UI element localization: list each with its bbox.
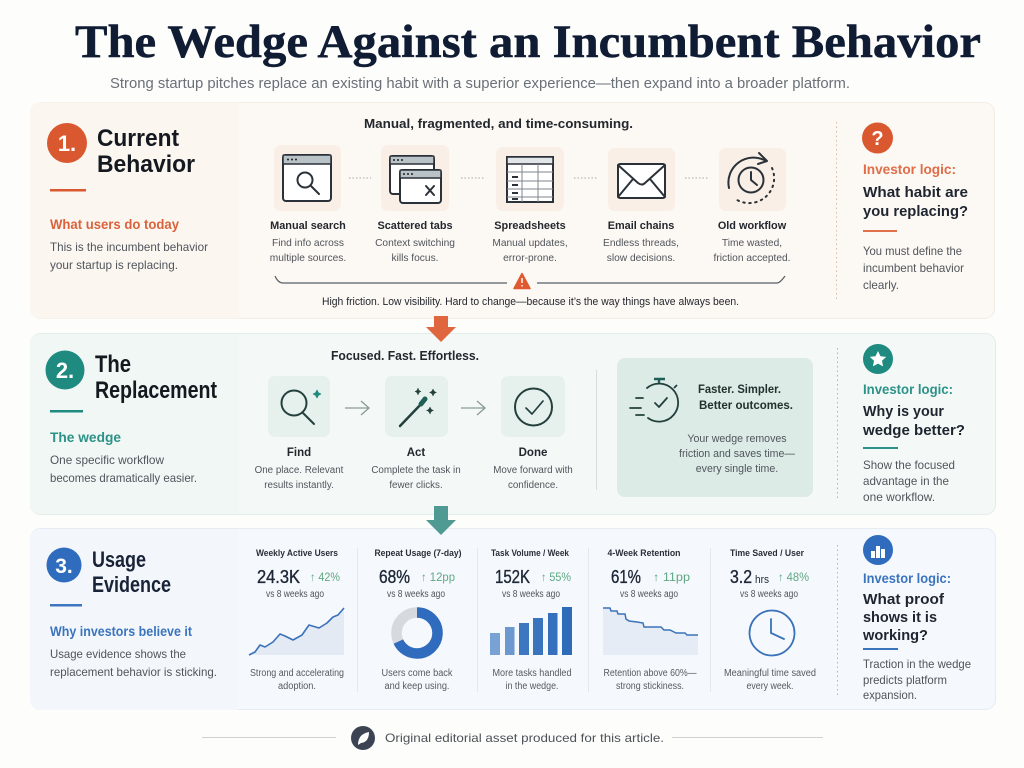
left column: usage evidence bbox=[30, 529, 238, 710]
metric: time saved: Time Saved / User bbox=[730, 548, 804, 558]
heading: Usage bbox=[92, 547, 146, 572]
metric: weekly active users: vs 8 weeks ago bbox=[266, 589, 324, 600]
workflow labels: multiple sources. bbox=[270, 253, 346, 264]
subtitle: Strong startup pitches replace an existing habit with a superior experience—then expand into a broader platform. bbox=[110, 75, 850, 92]
footer: Original editorial asset produced for this article. bbox=[385, 731, 664, 745]
tile: done bbox=[501, 376, 565, 437]
subheading: Why investors believe it bbox=[50, 624, 192, 639]
workflow labels: slow decisions. bbox=[607, 253, 675, 264]
metric: task volume: in the wedge. bbox=[506, 681, 558, 692]
callout: faster simpler: Better outcomes. bbox=[699, 400, 793, 412]
workflow labels: Context switching bbox=[375, 238, 455, 249]
workflow labels: Endless threads, bbox=[603, 238, 679, 249]
heading: The bbox=[95, 351, 131, 378]
replacement labels: Act bbox=[407, 447, 425, 459]
metric: task volume: More tasks handled bbox=[492, 668, 572, 679]
subheading: What users do today bbox=[50, 217, 179, 232]
metric: repeat usage: ↑ 12pp bbox=[421, 572, 455, 584]
left column: current behavior: Behavior bbox=[97, 151, 195, 178]
metric: repeat usage: Users come back bbox=[382, 668, 453, 679]
workflow labels: Time wasted, bbox=[722, 238, 782, 249]
badge 2 bbox=[46, 350, 84, 390]
workflow labels: Scattered tabs bbox=[377, 220, 453, 232]
investor logic 2: Show the focused bbox=[863, 459, 955, 472]
replacement labels: Complete the task in bbox=[371, 465, 461, 476]
metric: time saved: vs 8 weeks ago bbox=[740, 589, 798, 600]
investor logic 1: clearly. bbox=[863, 279, 899, 292]
donut chart bbox=[396, 612, 438, 654]
workflow labels: Spreadsheets bbox=[494, 220, 566, 232]
investor logic 3: What proof bbox=[863, 592, 944, 608]
left column: current behavior: your startup is replacing. bbox=[50, 259, 178, 272]
workflow labels: Email chains bbox=[608, 220, 674, 232]
workflow labels bbox=[270, 220, 791, 264]
line chart bbox=[249, 608, 344, 655]
badge 2: 2. bbox=[56, 358, 74, 383]
panel: usage evidence bbox=[30, 528, 996, 710]
metric: weekly active users: adoption. bbox=[278, 681, 316, 692]
workflow labels: Manual updates, bbox=[492, 238, 568, 249]
callout: faster simpler: every single time. bbox=[696, 463, 778, 475]
metric dividers bbox=[358, 548, 710, 692]
metric: retention: 61% bbox=[611, 567, 641, 587]
investor logic 3: shows it is bbox=[863, 610, 937, 626]
left column: replacement: becomes dramatically easier. bbox=[50, 472, 197, 485]
subheading: The wedge bbox=[50, 430, 121, 445]
metric: repeat usage bbox=[374, 548, 462, 692]
badge 1 bbox=[47, 123, 87, 163]
friction bracket with warning icon bbox=[275, 274, 785, 288]
replacement labels: results instantly. bbox=[264, 480, 334, 491]
investor logic 2: one workflow. bbox=[863, 491, 935, 504]
workflow heading: Manual, fragmented, and time-consuming. bbox=[364, 116, 633, 131]
workflow labels: kills focus. bbox=[392, 253, 438, 264]
connector dots bbox=[349, 177, 708, 179]
investor logic 1: incumbent behavior bbox=[863, 262, 964, 275]
metric: task volume: vs 8 weeks ago bbox=[502, 589, 560, 600]
left column: replacement: Replacement bbox=[95, 377, 217, 404]
replacement heading: Focused. Fast. Effortless. bbox=[331, 348, 479, 363]
investor logic 2 bbox=[862, 344, 965, 504]
arrow bbox=[461, 401, 485, 415]
metric: retention: Retention above 60%— bbox=[604, 668, 697, 679]
divider bbox=[836, 122, 838, 302]
investor logic 1: you replacing? bbox=[863, 204, 968, 220]
heading: Current bbox=[97, 125, 179, 152]
metric: retention: vs 8 weeks ago bbox=[620, 589, 678, 600]
metric: weekly active users bbox=[249, 548, 344, 692]
icon: clock bbox=[750, 610, 794, 656]
callout: faster simpler: Faster. Simpler. bbox=[698, 384, 781, 396]
replacement labels: Done bbox=[519, 447, 547, 459]
tile: spreadsheets bbox=[496, 147, 564, 211]
badge 3 bbox=[46, 548, 82, 582]
metric: repeat usage: Repeat Usage (7-day) bbox=[374, 548, 462, 558]
metric: retention bbox=[603, 548, 698, 692]
replacement labels bbox=[255, 447, 573, 491]
metric: time saved bbox=[724, 548, 816, 692]
replacement labels: One place. Relevant bbox=[255, 465, 344, 476]
metric: time saved: 3.2 bbox=[730, 567, 752, 587]
left column: replacement bbox=[30, 334, 239, 514]
metric: task volume: ↑ 55% bbox=[541, 572, 571, 584]
investor logic 1: You must define the bbox=[863, 245, 962, 258]
tile: email chains bbox=[608, 148, 675, 211]
investor logic 2: advantage in the bbox=[863, 475, 949, 488]
investor logic 3: Investor logic: bbox=[863, 571, 951, 586]
bar chart bbox=[490, 607, 572, 655]
tile: old workflow bbox=[719, 148, 786, 211]
investor logic 2: wedge better? bbox=[862, 423, 965, 439]
workflow labels: friction accepted. bbox=[713, 253, 791, 264]
workflow labels: Find info across bbox=[272, 238, 344, 249]
title: The Wedge Against an Incumbent Behavior bbox=[75, 16, 981, 68]
metric: task volume: 152K bbox=[495, 567, 530, 587]
investor logic 2: Investor logic: bbox=[863, 382, 953, 397]
investor logic 1: What habit are bbox=[863, 185, 968, 201]
metric: retention: ↑ 11pp bbox=[653, 572, 690, 584]
replacement labels: confidence. bbox=[508, 480, 558, 491]
workflow labels: error-prone. bbox=[503, 253, 557, 264]
badge 3: 3. bbox=[55, 555, 73, 578]
arrow: teal down bbox=[426, 506, 456, 535]
metric: retention: 4-Week Retention bbox=[608, 548, 680, 558]
investor logic 3: predicts platform bbox=[863, 674, 947, 687]
panel: the replacement bbox=[30, 334, 996, 514]
footer bbox=[202, 726, 823, 750]
metric: time saved: Meaningful time saved bbox=[724, 668, 816, 679]
tile: find bbox=[268, 376, 330, 437]
investor logic 3: Traction in the wedge bbox=[863, 658, 971, 671]
tile: scattered tabs bbox=[381, 145, 449, 211]
investor logic 1: ? bbox=[871, 128, 884, 150]
metric: retention: strong stickiness. bbox=[616, 681, 684, 692]
investor logic 1: Investor logic: bbox=[863, 162, 956, 177]
metric: weekly active users: ↑ 42% bbox=[310, 572, 340, 584]
investor logic 3: working? bbox=[862, 628, 928, 644]
metric: repeat usage: 68% bbox=[379, 567, 410, 587]
panel: current behavior bbox=[30, 102, 994, 318]
metric: time saved: hrs bbox=[755, 574, 769, 586]
metric: weekly active users: Weekly Active Users bbox=[256, 548, 338, 558]
metric: repeat usage: vs 8 weeks ago bbox=[387, 589, 445, 600]
left column: current behavior bbox=[30, 102, 239, 318]
workflow labels: Manual search bbox=[270, 220, 346, 232]
investor logic 3 bbox=[862, 535, 971, 702]
metric: time saved: every week. bbox=[746, 681, 794, 692]
description: This is the incumbent behavior bbox=[50, 241, 208, 254]
description: One specific workflow bbox=[50, 454, 165, 467]
step line chart bbox=[603, 608, 698, 655]
replacement labels: Find bbox=[287, 447, 311, 459]
left column: usage evidence: Evidence bbox=[92, 572, 171, 597]
replacement labels: fewer clicks. bbox=[389, 480, 443, 491]
replacement labels: Move forward with bbox=[493, 465, 573, 476]
investor logic 2: Why is your bbox=[863, 404, 944, 420]
icon: stopwatch bbox=[630, 379, 678, 422]
callout: faster simpler: friction and saves time— bbox=[679, 448, 795, 460]
metric: repeat usage: and keep using. bbox=[384, 681, 450, 692]
description: Usage evidence shows the bbox=[50, 648, 186, 661]
metric: task volume bbox=[490, 548, 572, 692]
metric: weekly active users: Strong and accelerating bbox=[250, 668, 344, 679]
callout: faster simpler: Your wedge removes bbox=[687, 433, 787, 445]
icon: feather bbox=[351, 726, 375, 750]
callout: faster simpler bbox=[617, 358, 813, 497]
friction caption: High friction. Low visibility. Hard to change—because it’s the way things have always been. bbox=[322, 296, 739, 308]
investor logic 1 bbox=[862, 122, 968, 292]
left column: usage evidence: replacement behavior is sticking. bbox=[50, 666, 217, 679]
arrow: orange down bbox=[426, 316, 456, 342]
tile: manual search bbox=[274, 145, 341, 211]
tile: act bbox=[385, 376, 448, 437]
badge 1: 1. bbox=[58, 131, 76, 156]
metric: time saved: ↑ 48% bbox=[778, 572, 809, 584]
investor logic 3: expansion. bbox=[863, 689, 917, 702]
arrow bbox=[345, 401, 369, 415]
workflow labels: Old workflow bbox=[718, 220, 787, 232]
metric: weekly active users: 24.3K bbox=[257, 567, 300, 587]
metric: task volume: Task Volume / Week bbox=[491, 548, 570, 558]
